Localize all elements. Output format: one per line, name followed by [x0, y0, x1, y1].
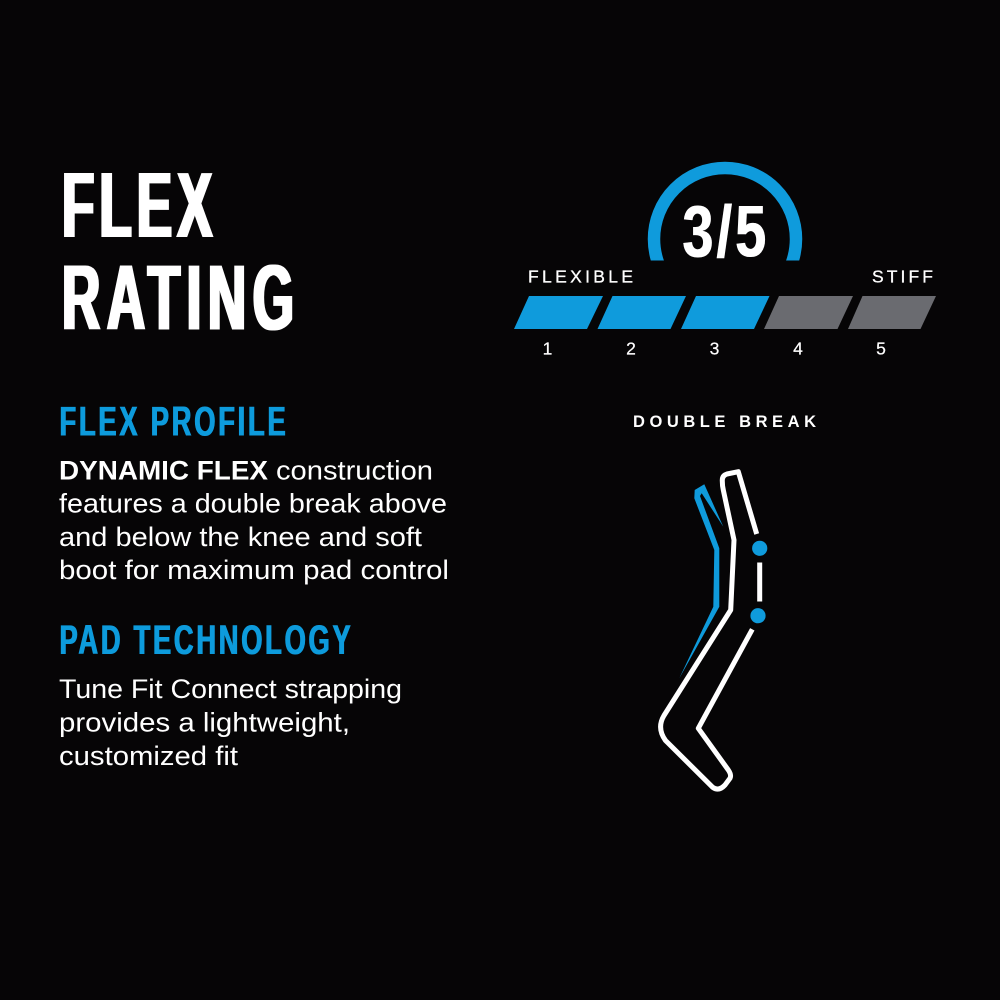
label: flexible: FLEXIBLE	[528, 266, 633, 286]
text block: flex profile: DYNAMIC FLEX	[59, 456, 268, 486]
heading: pad technology: PAD TECHNOLOGY	[60, 616, 351, 663]
scale numbers: 5	[876, 338, 886, 358]
scale numbers	[543, 338, 886, 358]
label: stiff: STIFF	[872, 266, 933, 286]
knee dash	[757, 562, 762, 602]
white blade outline	[661, 472, 757, 789]
rating value: 3/5	[682, 190, 766, 272]
text block: pad technology: Tune Fit Connect strapping	[59, 674, 402, 704]
text block: pad technology: customized fit	[59, 741, 239, 771]
text block: flex profile	[59, 456, 449, 585]
scale numbers: 1	[543, 338, 552, 358]
blue secondary flex profile	[679, 484, 723, 678]
text block: pad technology: provides a lightweight,	[59, 708, 350, 738]
title: FLEX	[62, 153, 212, 258]
flex scale	[514, 296, 936, 329]
lower break point	[750, 608, 766, 623]
text block: flex profile: and below the knee and soft	[59, 522, 423, 552]
scale numbers: 3	[710, 338, 719, 358]
gauge arc	[648, 162, 802, 260]
heading: flex profile: FLEX PROFILE	[60, 398, 286, 445]
text block: flex profile: features a double break above	[59, 488, 447, 518]
text block: flex profile: construction	[276, 456, 433, 486]
title	[62, 153, 294, 350]
text block: flex profile: boot for maximum pad control	[59, 555, 449, 585]
upper break point	[752, 541, 767, 556]
text block: pad technology	[59, 674, 402, 771]
title: RATING	[62, 246, 294, 350]
label: double break: DOUBLE BREAK	[633, 413, 816, 431]
diagram: double break blade	[661, 472, 767, 789]
scale numbers: 4	[793, 338, 803, 358]
scale numbers: 2	[626, 338, 636, 358]
